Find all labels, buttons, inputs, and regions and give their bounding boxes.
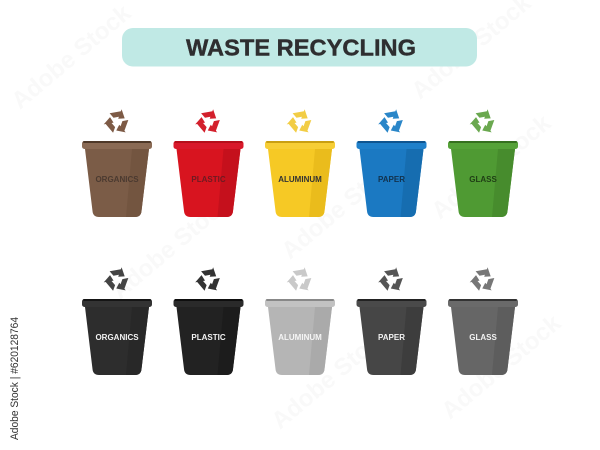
icon: recycle black <box>194 267 223 293</box>
stock credit: Adobe Stock | #620128764 <box>9 317 21 440</box>
watermark: Adobe Stock <box>107 189 237 305</box>
bin: organics mono <box>82 267 152 375</box>
icon: recycle yellow <box>285 109 315 135</box>
watermark: Adobe Stock <box>277 149 407 265</box>
bin: plastic colour <box>174 109 244 217</box>
watermark: Adobe Stock <box>267 319 397 435</box>
bin: glass colour <box>448 109 518 217</box>
icon: recycle light grey <box>285 267 315 293</box>
icon: recycle brown <box>102 109 132 135</box>
bin: glass mono: GLASS <box>469 333 497 342</box>
icon: recycle mid grey <box>468 267 498 293</box>
bin: plastic mono <box>174 267 244 375</box>
icon: recycle green <box>468 109 498 135</box>
bin: paper mono: PAPER <box>378 333 405 342</box>
icon: recycle dark grey <box>377 267 406 293</box>
bin: aluminum colour: ALUMINUM <box>278 175 322 184</box>
bin: paper colour <box>356 109 426 217</box>
watermark: Adobe Stock <box>437 309 567 425</box>
icon: recycle dark <box>102 267 132 293</box>
title: WASTE RECYCLING <box>186 34 416 60</box>
title banner <box>122 28 477 66</box>
bin: aluminum mono <box>265 267 335 375</box>
bin: plastic colour: PLASTIC <box>191 175 226 184</box>
watermark: Adobe Stock <box>7 0 137 115</box>
bin: plastic mono: PLASTIC <box>191 333 226 342</box>
bin: organics mono: ORGANICS <box>95 333 139 342</box>
bin: aluminum mono: ALUMINUM <box>278 333 322 342</box>
icon: recycle blue <box>377 109 406 135</box>
bin: organics colour <box>82 109 152 217</box>
bin: organics colour: ORGANICS <box>95 175 139 184</box>
bin: paper mono <box>356 267 426 375</box>
bin: glass colour: GLASS <box>469 175 497 184</box>
bin: aluminum colour <box>265 109 335 217</box>
watermark: Adobe Stock <box>427 109 557 225</box>
icon: recycle red <box>194 109 223 135</box>
bin: glass mono <box>448 267 518 375</box>
bin: paper colour: PAPER <box>378 175 405 184</box>
